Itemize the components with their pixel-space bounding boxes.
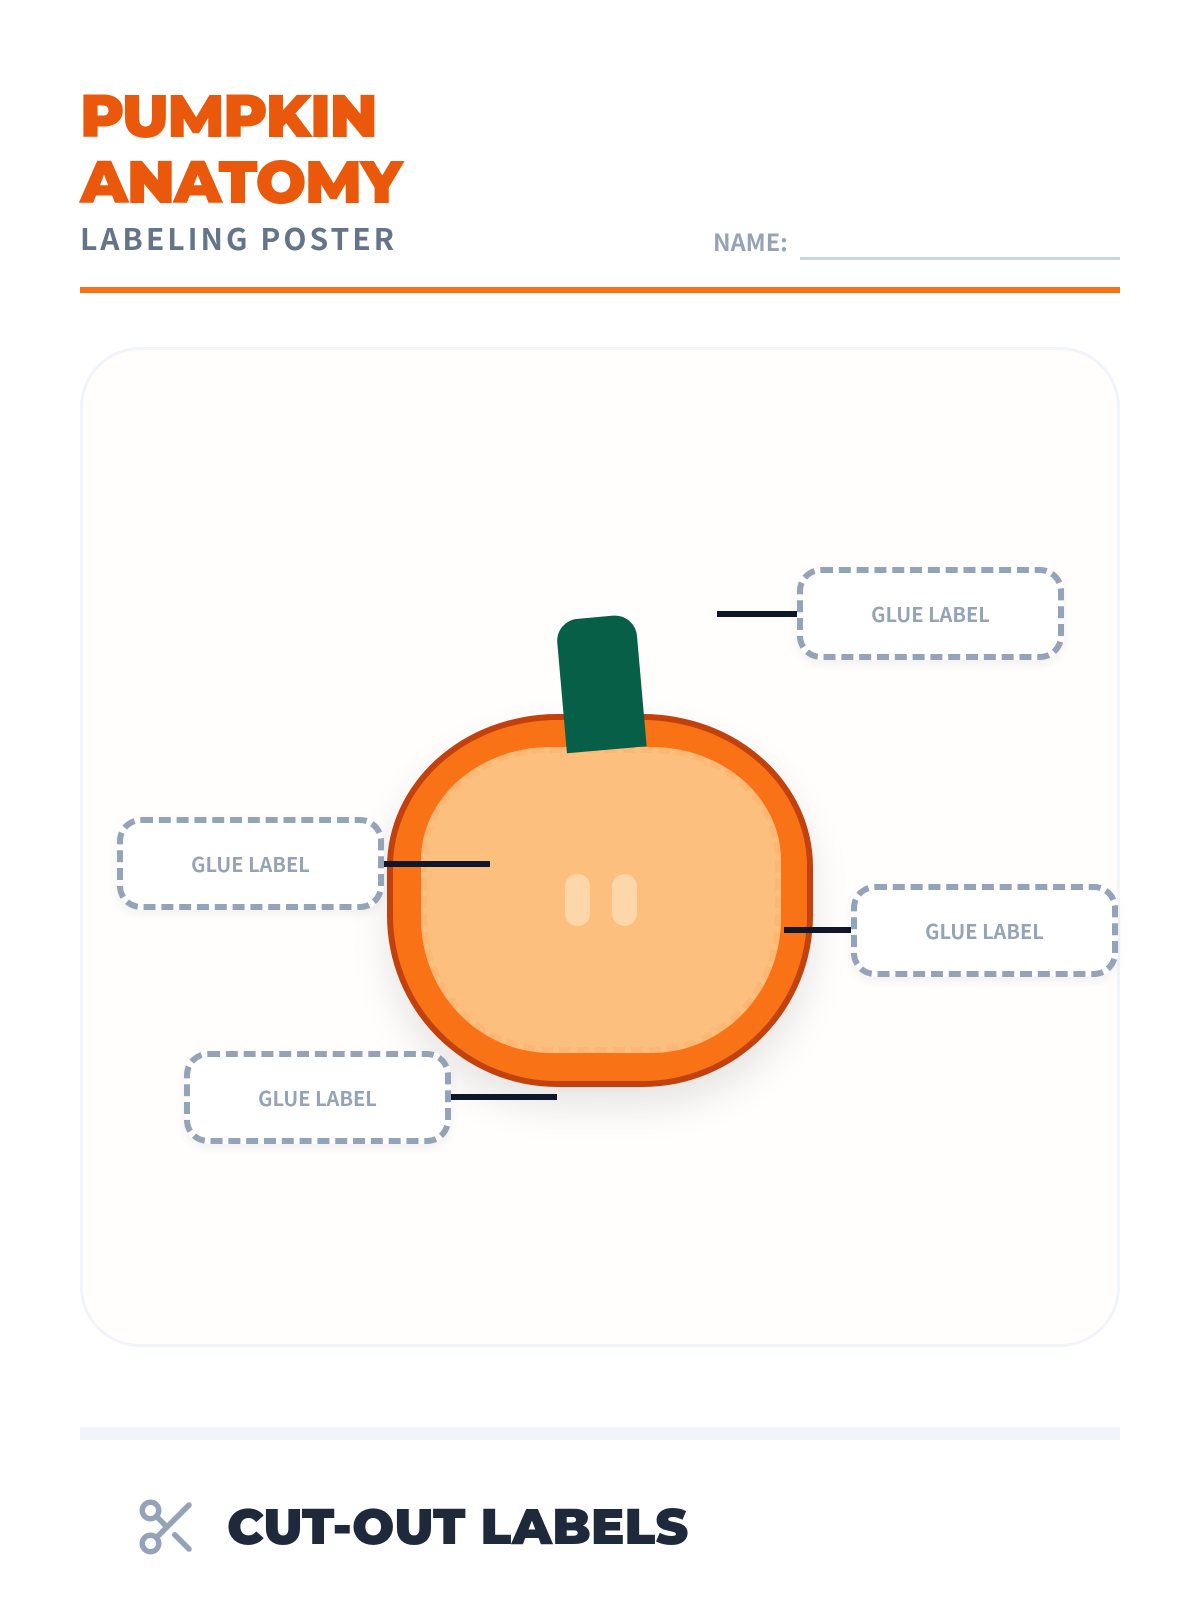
glue label: left: GLUE LABEL (191, 849, 310, 878)
glue label: right (851, 884, 1118, 977)
icon: scissors (140, 1500, 192, 1554)
leader line: top right (717, 611, 797, 617)
glue label: bottom left (184, 1051, 451, 1144)
name write-in line (800, 257, 1120, 260)
title: ANATOMY (80, 146, 401, 218)
pumpkin body (387, 714, 813, 1087)
title (78, 80, 404, 218)
section heading: cut-out labels: CUT-OUT LABELS (227, 1496, 688, 1557)
glue label: left (117, 817, 384, 910)
panel: pumpkin diagram (80, 347, 1120, 1347)
left seed highlight (565, 874, 590, 926)
glue label: right: GLUE LABEL (925, 916, 1044, 945)
glue label: bottom left: GLUE LABEL (258, 1083, 377, 1112)
title: PUMPKIN (80, 80, 376, 152)
leader line: right (784, 927, 851, 933)
glue label: top right (797, 567, 1064, 660)
leader line: left (384, 861, 490, 867)
header rule (80, 287, 1120, 293)
glue label: top right: GLUE LABEL (871, 599, 990, 628)
leader line: bottom left (451, 1094, 557, 1100)
name label: NAME: (713, 224, 788, 258)
divider band (80, 1427, 1120, 1440)
pumpkin flesh (421, 747, 781, 1053)
subtitle: LABELING POSTER (80, 215, 397, 259)
pumpkin stem (556, 614, 647, 753)
right seed highlight (612, 874, 637, 926)
